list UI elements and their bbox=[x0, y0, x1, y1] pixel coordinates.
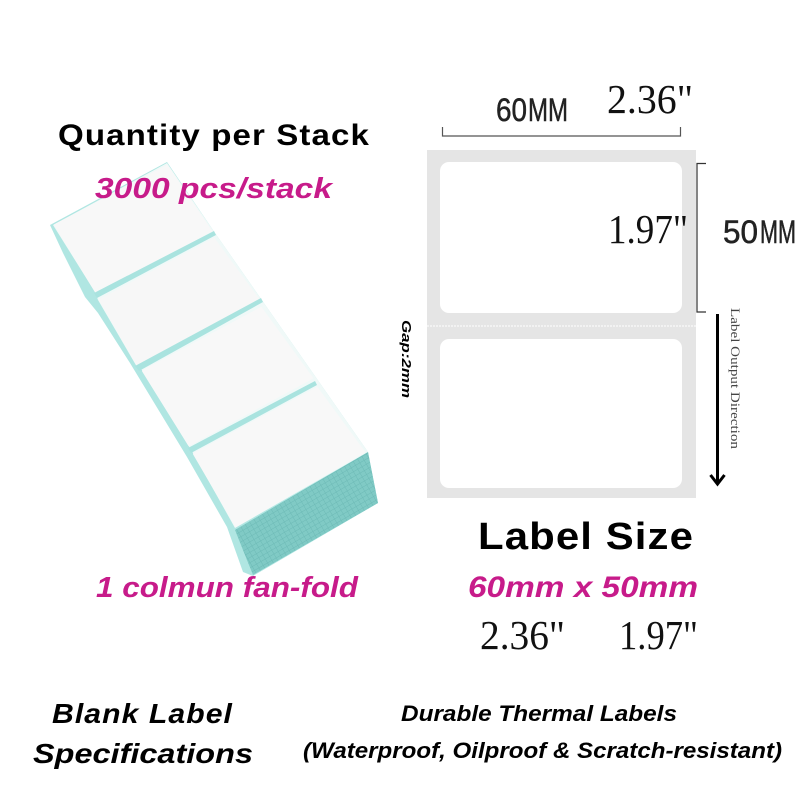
label 3 bbox=[143, 308, 312, 445]
stat: size in mm: 60mm x 50mm bbox=[468, 571, 698, 604]
height bracket bbox=[697, 164, 706, 312]
feature text: durable thermal labels: (Waterproof, Oilproof & Scratch-resistant) bbox=[303, 738, 782, 763]
bottom label bbox=[440, 339, 682, 488]
stack end face bbox=[235, 452, 378, 575]
arrow: label output direction bbox=[710, 314, 724, 484]
title: blank label specifications: Blank Label bbox=[52, 698, 233, 729]
width bracket bbox=[442, 127, 680, 136]
dimension: height in mm bbox=[723, 214, 796, 250]
label size diagram bbox=[427, 150, 696, 498]
label 1 bbox=[55, 166, 211, 292]
heading: label size: Label Size bbox=[478, 516, 694, 558]
dimension: width in mm: MM bbox=[528, 92, 568, 128]
heading: quantity per stack: Quantity per Stack bbox=[58, 119, 370, 152]
dimension: width in mm: 60 bbox=[496, 92, 527, 128]
fold strip 1 bbox=[94, 231, 216, 298]
dimension: width in mm bbox=[496, 92, 568, 128]
stat: width in inches: 2.36" bbox=[480, 612, 565, 658]
label 4 bbox=[194, 388, 364, 526]
stack silhouette bbox=[50, 162, 378, 576]
feature text: durable thermal labels bbox=[303, 701, 782, 763]
image: fan-fold label stack bbox=[50, 162, 378, 576]
feature text: durable thermal labels: Durable Thermal Labels bbox=[401, 701, 677, 726]
stat: height in inches: 1.97" bbox=[619, 612, 698, 658]
dimension: height in inches: 1.97" bbox=[608, 206, 688, 252]
fold strip 2 bbox=[135, 298, 263, 371]
dimension: width in inches: 2.36" bbox=[607, 76, 693, 122]
gap note: Gap:2mm bbox=[399, 320, 414, 399]
text: label output direction: Label Output Direction bbox=[728, 308, 743, 450]
title: blank label specifications bbox=[33, 698, 253, 769]
title: blank label specifications: Specifications bbox=[33, 738, 253, 769]
label 2 bbox=[100, 239, 258, 366]
stat: pieces per stack: 3000 pcs/stack bbox=[95, 173, 334, 205]
backing sheet bbox=[427, 150, 696, 498]
caption: fan-fold type: 1 colmun fan-fold bbox=[96, 572, 359, 604]
top label bbox=[440, 162, 682, 313]
fold strip 3 bbox=[188, 381, 317, 453]
dimension: height in mm: 50 bbox=[723, 214, 758, 250]
gap perforation bbox=[427, 325, 696, 327]
stack top surface bbox=[53, 163, 368, 528]
